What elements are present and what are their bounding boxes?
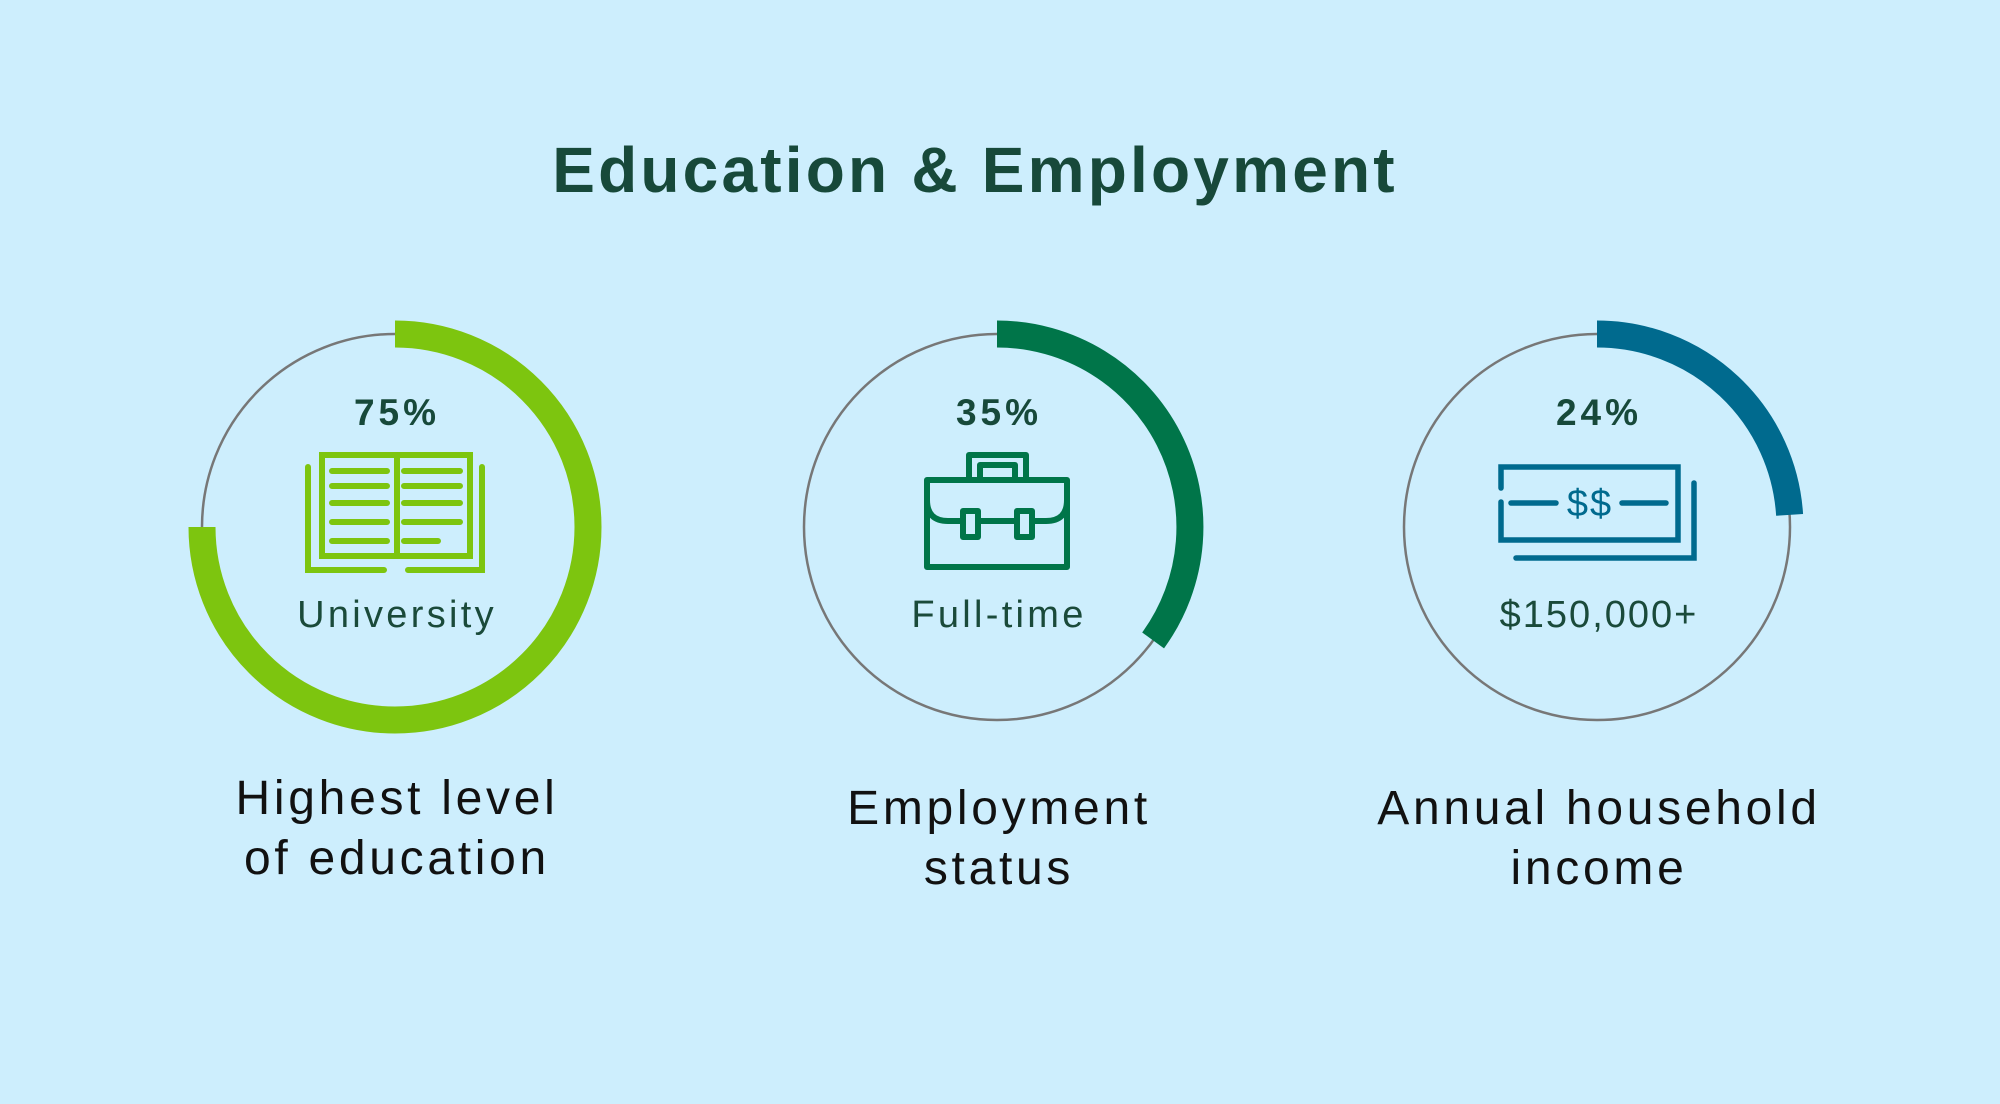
caption: highest level of education: Highest level: [236, 772, 558, 825]
caption: highest level of education: of education: [244, 832, 550, 885]
label: $150,000+: $150,000+: [1500, 594, 1698, 636]
ring: employment 35%: [804, 334, 1190, 720]
caption: annual household income: income: [1511, 842, 1687, 895]
label: Full-time: Full-time: [911, 594, 1087, 636]
caption: employment status: Employment: [847, 782, 1151, 835]
panel: education: [202, 334, 588, 885]
percent: 35%: 35%: [956, 392, 1042, 433]
icon: briefcase: [927, 455, 1067, 567]
icon: book: [308, 455, 482, 570]
ring: income 24%: [1404, 334, 1790, 720]
ring: education 75%: [202, 334, 588, 720]
caption: employment status: status: [924, 842, 1074, 895]
panel: income: [1377, 334, 1821, 895]
icon: money: [1501, 467, 1694, 558]
caption: annual household income: Annual household: [1377, 782, 1821, 835]
percent: 75%: 75%: [354, 392, 440, 433]
panel: employment: [804, 334, 1190, 895]
title: Education & Employment: [552, 134, 1398, 206]
percent: 24%: 24%: [1556, 392, 1642, 433]
icon: money: $$: [1567, 483, 1613, 525]
label: University: University: [297, 594, 497, 636]
